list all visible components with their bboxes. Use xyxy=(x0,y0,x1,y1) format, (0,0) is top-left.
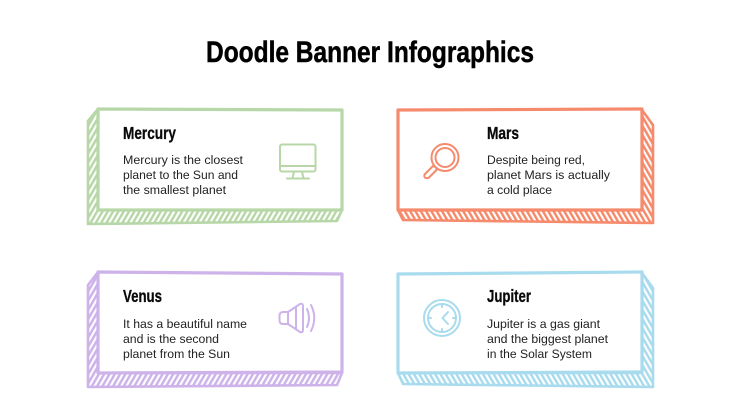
heading: Jupiter: Jupiter xyxy=(487,286,531,306)
panel: Mars xyxy=(398,109,653,223)
text block: Venus: and is the second xyxy=(123,332,219,346)
icon: magnifying glass xyxy=(424,144,458,178)
text block: Mercury xyxy=(123,153,244,197)
hatched banner depth: Mercury xyxy=(88,109,342,224)
text block: Mars: planet Mars is actually xyxy=(487,168,611,182)
text block: Venus xyxy=(123,317,247,361)
banner front: Venus xyxy=(98,272,342,373)
heading: Mars: Mars xyxy=(487,123,519,143)
text block: Jupiter: in the Solar System xyxy=(487,347,592,361)
banner front: Mars xyxy=(398,109,642,210)
text block: Jupiter xyxy=(487,317,609,361)
text block: Mercury: the smallest planet xyxy=(123,183,227,197)
text block: Venus: It has a beautiful name xyxy=(123,317,247,331)
panel: Jupiter xyxy=(398,272,653,387)
heading: Mercury: Mercury xyxy=(123,123,176,143)
text block: Mercury: Mercury is the closest xyxy=(123,153,244,167)
panel: Venus xyxy=(88,272,342,387)
banner front: Mercury xyxy=(98,109,342,210)
heading: Venus: Venus xyxy=(123,286,162,306)
text block: Mars: a cold place xyxy=(487,183,552,197)
icon: clock xyxy=(424,300,460,336)
icon: speaker xyxy=(280,304,314,332)
icon: monitor xyxy=(280,144,316,178)
text block: Mars xyxy=(487,153,611,197)
banner front: Jupiter xyxy=(398,272,642,373)
text block: Mercury: planet to the Sun and xyxy=(123,168,238,182)
hatched banner depth: Venus xyxy=(88,272,342,387)
text block: Venus: planet from the Sun xyxy=(123,347,230,361)
text block: Jupiter: and the biggest planet xyxy=(487,332,609,346)
panel: Mercury xyxy=(88,109,342,224)
hatched banner depth: Mars xyxy=(398,110,653,223)
text block: Mars: Despite being red, xyxy=(487,153,585,167)
text block: Jupiter: Jupiter is a gas giant xyxy=(487,317,601,331)
title: Doodle Banner Infographics xyxy=(206,36,534,69)
hatched banner depth: Jupiter xyxy=(398,273,653,387)
